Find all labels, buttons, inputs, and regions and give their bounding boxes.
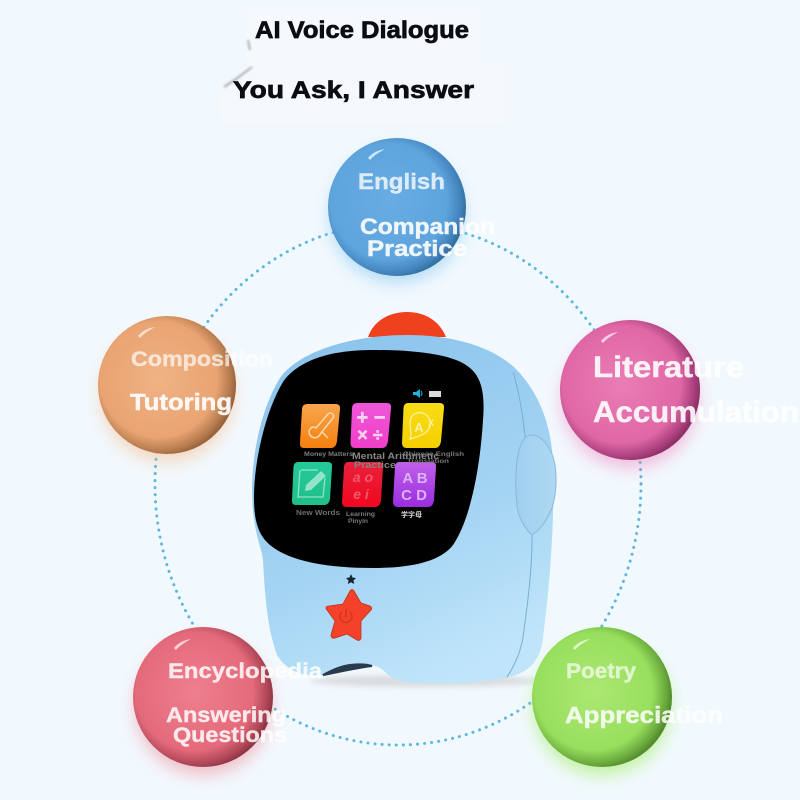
app icon: Learning Pinyin [342, 462, 383, 525]
app icon: letters: C D [401, 487, 427, 504]
app icon: Chinese-English Translation: A [414, 420, 424, 435]
bubble: English Companion Practice: Practice [367, 236, 467, 261]
bubble: Literature Accumulation: Accumulation [593, 396, 799, 429]
bubble: Poetry Appreciation: Poetry [566, 660, 636, 683]
overlapping app captions: Practice [354, 460, 396, 471]
bubble: Encyclopedia Answering Questions: Encyclopedia [168, 660, 322, 683]
bubble: Composition Tutoring [98, 316, 273, 461]
overlapping app captions [352, 451, 464, 471]
app icon: Learning Pinyin: e i [353, 486, 370, 502]
app icon: Chinese-English Translation [402, 403, 444, 448]
icon: red top button [368, 312, 446, 337]
app icon: Mental Arithmetic Practice: × ÷ [357, 425, 383, 445]
shadow under device [310, 675, 540, 687]
bubble: English Companion Practice [328, 138, 495, 282]
app icon: Learning Pinyin: a o [353, 469, 374, 485]
bubble: Literature Accumulation: Literature [593, 351, 744, 384]
bubble: Composition Tutoring: Tutoring [130, 389, 232, 415]
app icon: Money Matters [300, 404, 353, 458]
app icon: Chinese-English Translation: X [428, 418, 434, 428]
bubble: Poetry Appreciation [532, 627, 723, 774]
screen [254, 350, 484, 568]
device: blue robot learning machine [252, 312, 556, 687]
icon: small black star [346, 574, 356, 584]
bubble: Encyclopedia Answering Questions: Answering [166, 704, 286, 727]
bubble: Literature Accumulation [560, 320, 799, 467]
speaker and battery indicators [413, 389, 441, 398]
bubble: English Companion Practice: English [358, 169, 445, 194]
side ear [516, 435, 556, 535]
overlapping app captions: Mental Arithmetic [352, 451, 439, 462]
title [220, 8, 510, 124]
icon: red star power button [326, 590, 372, 640]
bubble: English Companion Practice: Companion [360, 214, 495, 239]
bubble: Encyclopedia Answering Questions [133, 627, 322, 774]
bubble: Encyclopedia Answering Questions: Questions [173, 724, 287, 747]
bubble: Poetry Appreciation: Appreciation [565, 702, 723, 728]
overlapping app captions: Chinese English [403, 451, 464, 458]
app icon: letters [393, 462, 436, 519]
app icon: letters: 学字母 [401, 510, 422, 519]
overlapping app captions: Translation [407, 458, 449, 465]
app icon: Learning Pinyin: Pinyin [348, 519, 368, 525]
app icon: Money Matters: Money Matters [304, 451, 353, 458]
app icon: New Words: New Words [296, 510, 340, 517]
bubble: Composition Tutoring: Composition [131, 348, 273, 371]
app icon: Mental Arithmetic Practice: + − [357, 407, 385, 429]
base notch [323, 664, 372, 675]
device body [252, 335, 553, 684]
app icon: Mental Arithmetic Practice [350, 403, 391, 448]
body seam [507, 372, 532, 677]
app icon: New Words [292, 462, 340, 517]
dotted orbit ring [155, 223, 641, 745]
app icon: letters: A B [402, 470, 428, 487]
app icon: Learning Pinyin: Learning [346, 512, 375, 518]
title: AI Voice Dialogue [255, 17, 469, 44]
title: You Ask, I Answer [233, 77, 474, 104]
